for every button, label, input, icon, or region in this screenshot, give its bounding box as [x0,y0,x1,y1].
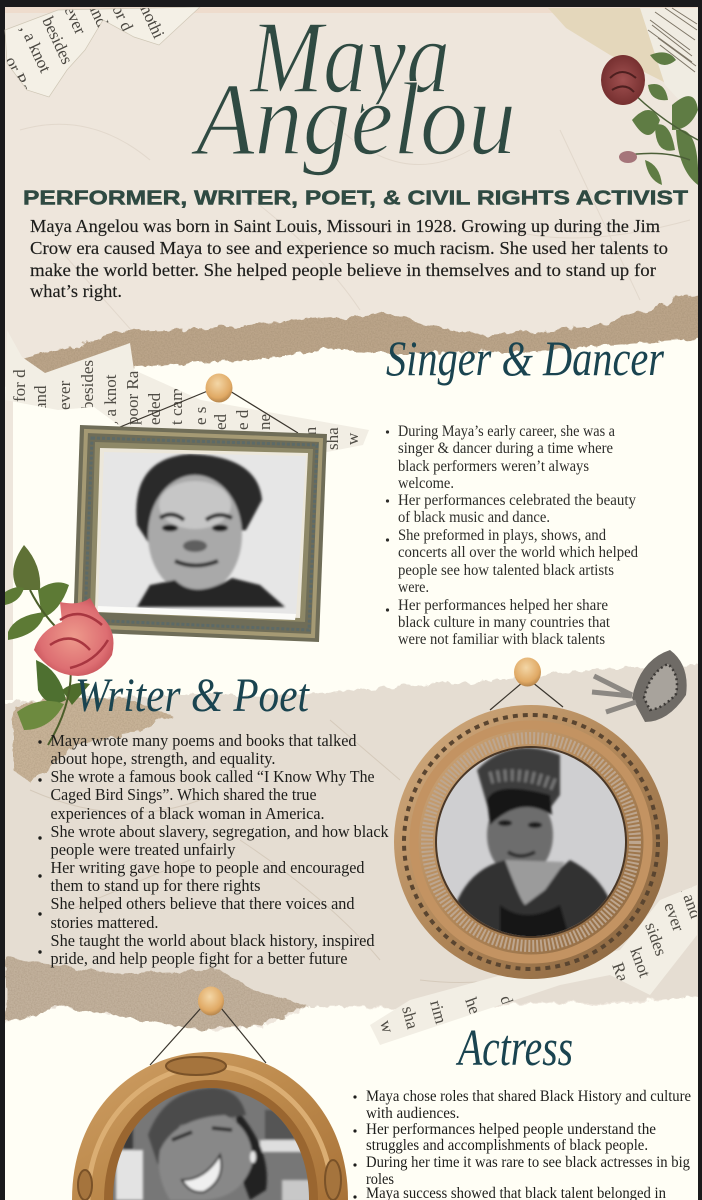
list: writer and poet: pride, and help people fight for a better future [50,949,348,968]
main title: Angelou [190,62,516,177]
list: actress: Her performances helped people understand the [366,1121,656,1138]
newsprint scrap: top left: besides [38,14,77,67]
newsprint scrap: top left: and [84,0,112,30]
list: writer and poet: She taught the world about black history, inspired [50,931,375,950]
intro paragraph: Maya Angelou was born in Saint Louis, Missouri in 1928. Growing up during the Jim [30,216,660,236]
list: actress: struggles and accomplishments of black people. [366,1137,648,1154]
newsprint scrap: behind frame one: e d [233,409,252,430]
list: singer and dancer: concerts all over the world which helped [398,544,638,561]
list: singer and dancer: were. [398,579,429,596]
hanger and pin: frame one [120,374,298,433]
oval gold frame with smiling portrait [72,1052,348,1200]
list: singer and dancer: of black music and dance. [398,509,550,526]
newsprint scrap: bottom right: sha [398,1004,422,1031]
newsprint scrap: behind frame one: ed [211,413,230,430]
list: writer and poet: Maya wrote many poems and books that talked [50,731,357,750]
newsprint scrap: behind frame one: , a knot [101,374,120,425]
torn tan paper strip: upper [20,295,702,378]
newsprint scrap: bottom right [370,883,702,1045]
intro paragraph: what’s right. [30,281,122,301]
newsprint scrap: bottom right: he [461,995,485,1016]
list: singer and dancer: black performers weren’t always [398,458,589,475]
list: singer and dancer: During Maya’s early career, she was a [398,423,615,440]
torn tan paper strip: lower [5,955,308,1030]
newsprint scrap: behind frame one: poor Ra [123,370,142,425]
newsprint scrap: top left: or Ra [1,54,35,96]
list: singer and dancer: black culture in many countries that [398,614,611,631]
newsprint scrap: behind frame one: m [301,427,320,440]
list: singer and dancer: were not familiar with black talents [398,631,605,648]
main title: Maya [248,0,450,115]
cream section: actress [0,995,702,1200]
round copper frame with portrait [394,705,668,979]
newsprint scrap: bottom right: knot [626,945,655,980]
heading: actress: Actress [456,1020,573,1077]
newsprint scrap: top left: or d [108,2,137,35]
list: writer and poet: She helped others believe that there voices and [50,894,355,913]
newsprint scrap: behind frame one: sha [323,427,342,450]
newsprint scrap: behind frame one [5,343,369,452]
rose and leaves: top right [601,52,698,185]
portrait photo: round frame [437,748,625,936]
list: singer and dancer: singer & dancer during a time where [398,440,613,457]
newsprint scrap: top left: , a knot [16,22,55,76]
list: actress [353,1088,691,1200]
newsprint scrap: bottom right: sides [641,920,671,958]
top edge bar [0,0,702,7]
list: writer and poet: Her writing gave hope to people and encouraged [50,858,365,877]
list: writer and poet: stories mattered. [50,913,158,932]
list: writer and poet: She wrote a famous book called “I Know Why The [50,767,374,786]
newsprint scrap: behind frame one: eded [145,392,164,425]
heading: writer and poet: Writer & Poet [75,669,310,722]
open book corner: top right [548,8,698,120]
list: singer and dancer: Her performances celebrated the beauty [398,492,636,509]
list: writer and poet: She wrote about slavery, segregation, and how black [50,822,389,841]
main title [190,0,516,177]
child portrait photo [98,452,306,614]
newsprint scrap: bottom right: ever [660,900,688,934]
newsprint scrap: behind frame one: for d [10,369,29,402]
list: actress: roles [366,1171,394,1188]
list: singer and dancer: Her performances helped her share [398,597,608,614]
list: writer and poet: about hope, strength, and equality. [50,749,276,768]
list: actress: with audiences. [366,1105,460,1122]
list: singer and dancer: people see how talented black artists [398,562,614,579]
newsprint scrap: behind frame one: besides [78,360,97,410]
list: writer and poet: people were treated unfairly [50,840,236,859]
butterfly [592,650,687,722]
newsprint scrap: top left: nothi [136,2,168,42]
list: singer and dancer: She preformed in plays, shows, and [398,527,606,544]
portrait photo: oval frame [110,1085,315,1200]
newsprint scrap: bottom right: Ra [608,960,633,985]
hanger and pin: oval frame [150,986,266,1065]
newsprint scrap: top left [1,0,200,97]
pink rose and leaves: left [5,545,114,745]
list: writer and poet: them to stand up for there rights [50,876,260,895]
list: singer and dancer [386,423,638,648]
newsprint scrap: bottom right: rim [426,998,451,1026]
list: writer and poet: experiences of a black woman in America. [50,804,324,823]
intro paragraph: Crow era caused Maya to see and experience so much racism. She used her talents to [30,238,668,258]
newsprint scrap: behind frame one: e s [191,407,210,425]
intro paragraph [30,216,668,301]
cream section: singer and dancer [0,330,702,1200]
intro paragraph: make the world better. She helped people believe in themselves and to stand up for [30,260,656,280]
list: singer and dancer: welcome. [398,475,454,492]
list: writer and poet: Caged Bird Sings”. Which shared the true [50,785,316,804]
newsprint scrap: behind frame one: ever [55,380,74,410]
newsprint scrap: top left: ever [60,3,90,38]
newsprint scrap: bottom right: w [376,1018,398,1036]
subtitle: PERFORMER, WRITER, POET, & CIVIL RIGHTS ACTIVIST [23,188,688,210]
tan strip behind writer heading [13,696,172,782]
newsprint scrap: behind frame one: and [31,385,50,410]
beige torn section: writer and poet [0,664,702,1007]
square picture frame with child portrait [73,425,327,642]
newsprint scrap: behind frame one: ne [255,414,274,430]
list: writer and poet [38,731,389,968]
newsprint scrap: behind frame one: t cam [167,388,186,425]
newsprint scrap: bottom right: d [496,993,517,1008]
hanger and pin: round frame [490,658,563,710]
newsprint scrap: behind frame one: w [343,432,362,445]
